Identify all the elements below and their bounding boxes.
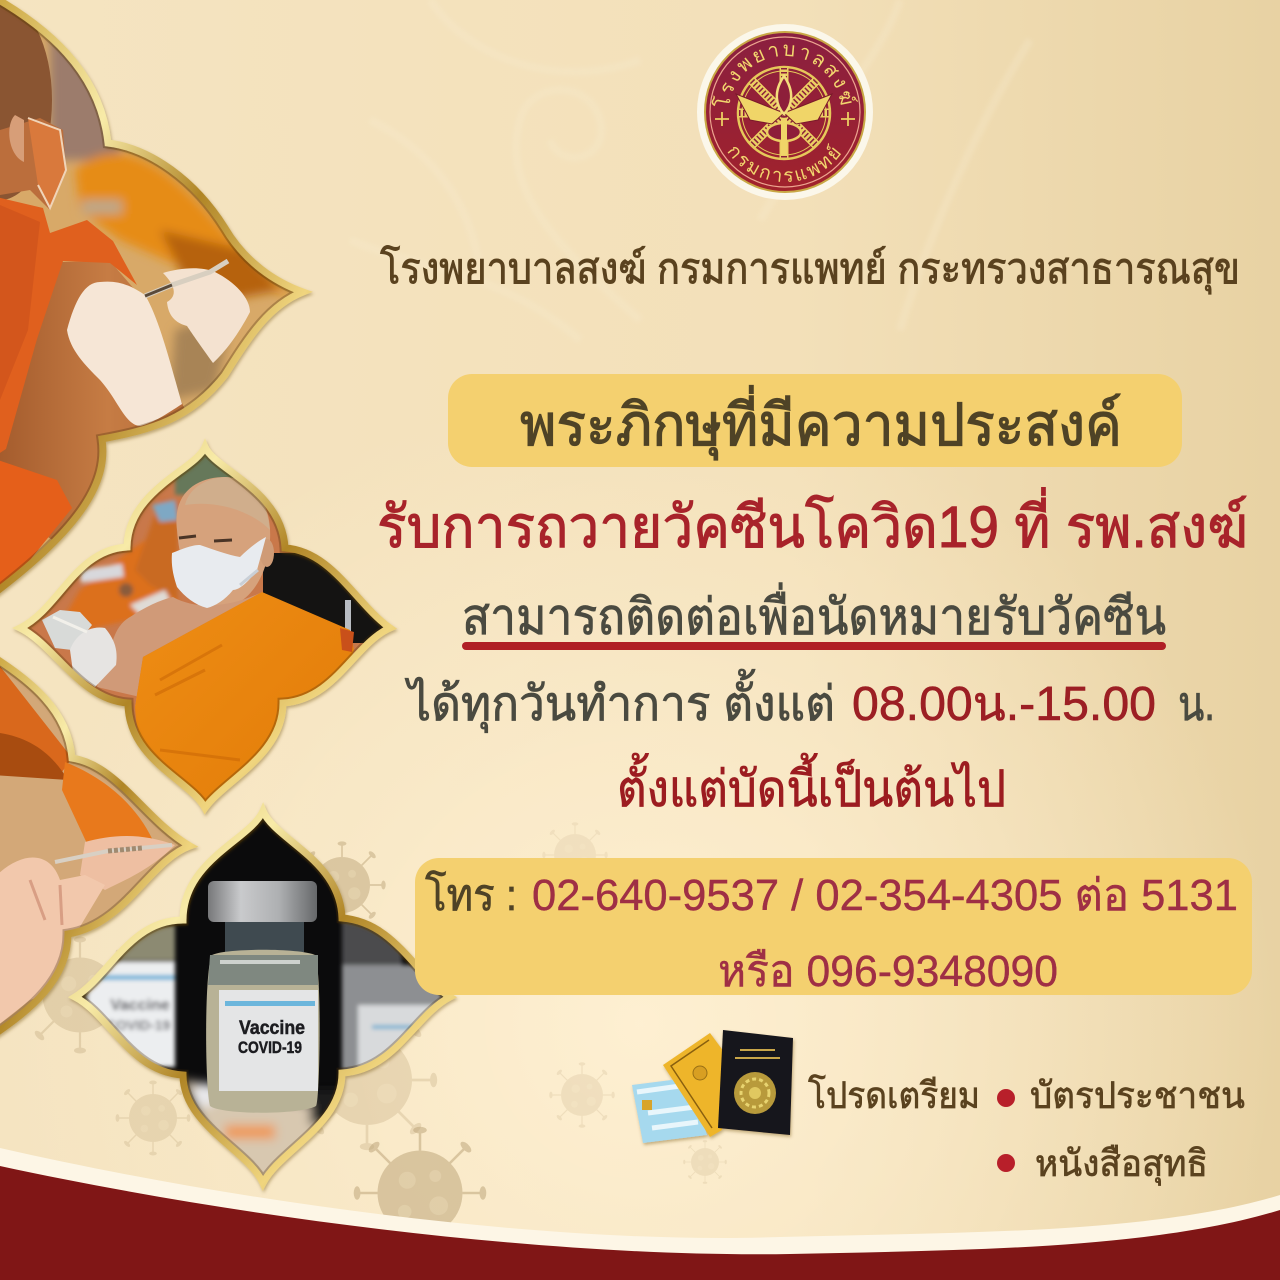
red subheading: รับการถวายวัคซีนโควิด19 ที่ รพ.สงฆ์ [377, 487, 1248, 560]
blurred vial label: Vaccine [110, 997, 170, 1014]
photo frame: monk wearing face mask [15, 445, 395, 815]
documents to prepare [808, 1074, 1245, 1186]
appointment line with underline: สามารถติดต่อเพื่อนัดหมายรับวัคซีน [462, 583, 1166, 645]
contact pill [415, 858, 1252, 996]
logo bottom text: กรมการแพทย์ [728, 143, 841, 182]
vial label: COVID-19 [238, 1038, 302, 1057]
documents to prepare: หนังสือสุทธิ [1035, 1143, 1208, 1186]
photo frame: monk shoulder vaccination [0, 0, 312, 596]
documents to prepare: โปรดเตรียม [808, 1074, 980, 1116]
logo top text: โรงพยาบาลสงฆ์ [712, 44, 858, 106]
icon: ID card and documents [632, 1030, 793, 1143]
phone line two: หรือ 096-9348090 [718, 947, 1058, 996]
opening hours [404, 669, 1215, 733]
photo frame: COVID-19 vaccine vials [70, 808, 455, 1188]
opening hours: น. [1178, 678, 1215, 731]
opening hours: 08.00น.-15.00 [852, 678, 1156, 731]
virus decorations [22, 822, 727, 1259]
headline text: พระภิกษุที่มีความประสงค์ [520, 385, 1122, 461]
start date line: ตั้งแต่บัดนี้เป็นต้นไป [617, 753, 1006, 817]
phone line one: โทร : [425, 870, 517, 920]
documents to prepare: บัตรประชาชน [1030, 1075, 1245, 1116]
bottom curved band [0, 1148, 1280, 1280]
headline pill [448, 374, 1182, 467]
phone line one: 02-640-9537 / 02-354-4305 ต่อ 5131 [532, 871, 1238, 920]
vial label: Vaccine [239, 1018, 305, 1039]
photo frame: COVID-19 vaccine vials: COVID-19 [106, 1017, 170, 1033]
hospital logo [697, 24, 873, 200]
photo frame: syringe injection [0, 655, 197, 1040]
opening hours: ได้ทุกวันทำการ ตั้งแต่ [404, 669, 835, 733]
